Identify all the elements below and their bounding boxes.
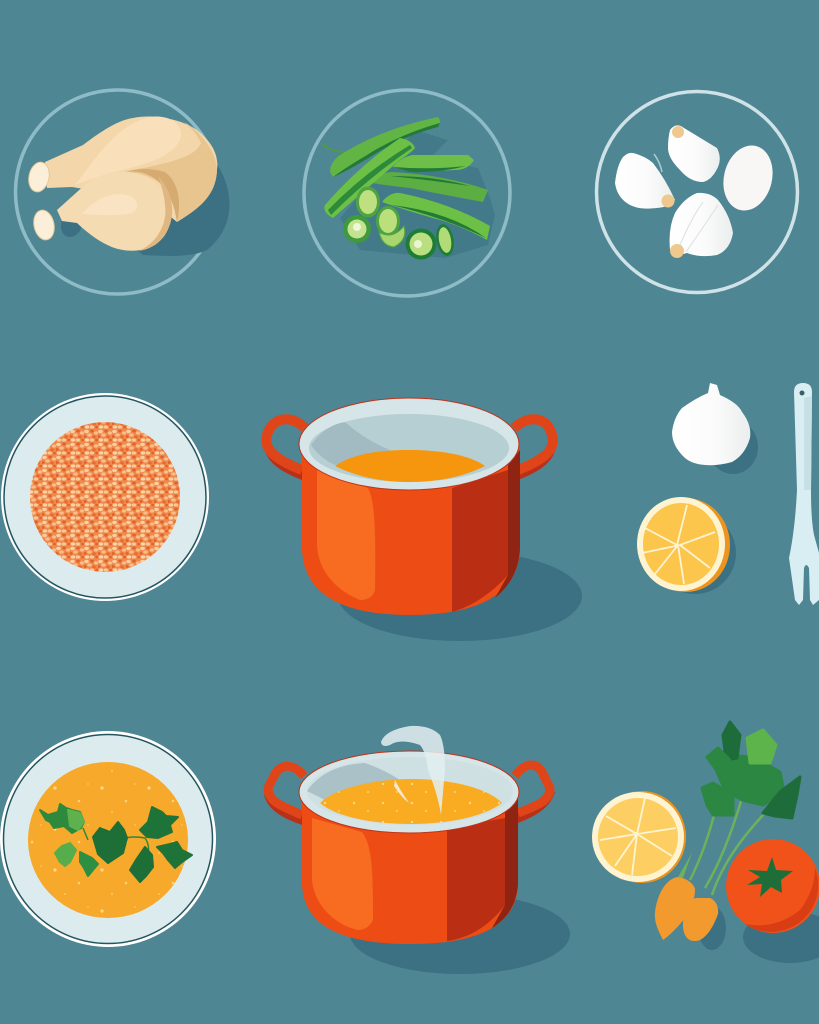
plate: chicken drumsticks <box>16 90 229 294</box>
leaves <box>702 722 800 818</box>
pot: lower with soup <box>264 726 555 944</box>
orange broth <box>335 450 485 482</box>
drumstick knob upper <box>26 160 52 194</box>
carrots with greens <box>655 722 800 950</box>
plate: soup with parsley <box>0 731 216 947</box>
parsley stems <box>83 828 149 855</box>
pot shadow upper <box>338 551 582 641</box>
soup <box>28 762 188 918</box>
garlic clove top <box>668 125 720 182</box>
garlic bulb <box>672 383 758 474</box>
plate: red lentils <box>1 393 209 601</box>
soup <box>320 779 502 824</box>
bean shadow <box>340 130 495 258</box>
garlic clove left <box>615 153 675 209</box>
plate: garlic cloves <box>596 92 798 292</box>
chicken shadow <box>61 150 229 256</box>
fork <box>789 383 819 605</box>
garlic clove right <box>717 140 779 216</box>
drumstick knob lower <box>31 208 57 242</box>
parsley leaves <box>40 804 192 882</box>
pot handles <box>264 446 302 480</box>
pot body <box>302 792 518 944</box>
pot shadow lower <box>350 894 570 974</box>
carrot shadow <box>698 906 726 950</box>
steam <box>381 726 445 815</box>
icon: chicken <box>26 116 217 251</box>
pot handles <box>264 792 302 825</box>
lower drumstick <box>57 172 171 251</box>
icon: green beans <box>322 117 490 240</box>
pot rim <box>299 398 519 490</box>
lentils <box>30 422 180 572</box>
pot rim <box>299 751 519 833</box>
garlic clove bottom <box>670 193 733 256</box>
pot body <box>302 445 520 615</box>
tomato <box>726 839 819 963</box>
pot: upper with orange broth <box>264 398 556 615</box>
bean slices <box>343 186 456 260</box>
carrots <box>655 877 695 940</box>
plate: green beans <box>304 90 510 296</box>
lemon slice upper <box>637 497 736 594</box>
stems <box>690 798 765 895</box>
lemon slice lower <box>592 791 686 883</box>
